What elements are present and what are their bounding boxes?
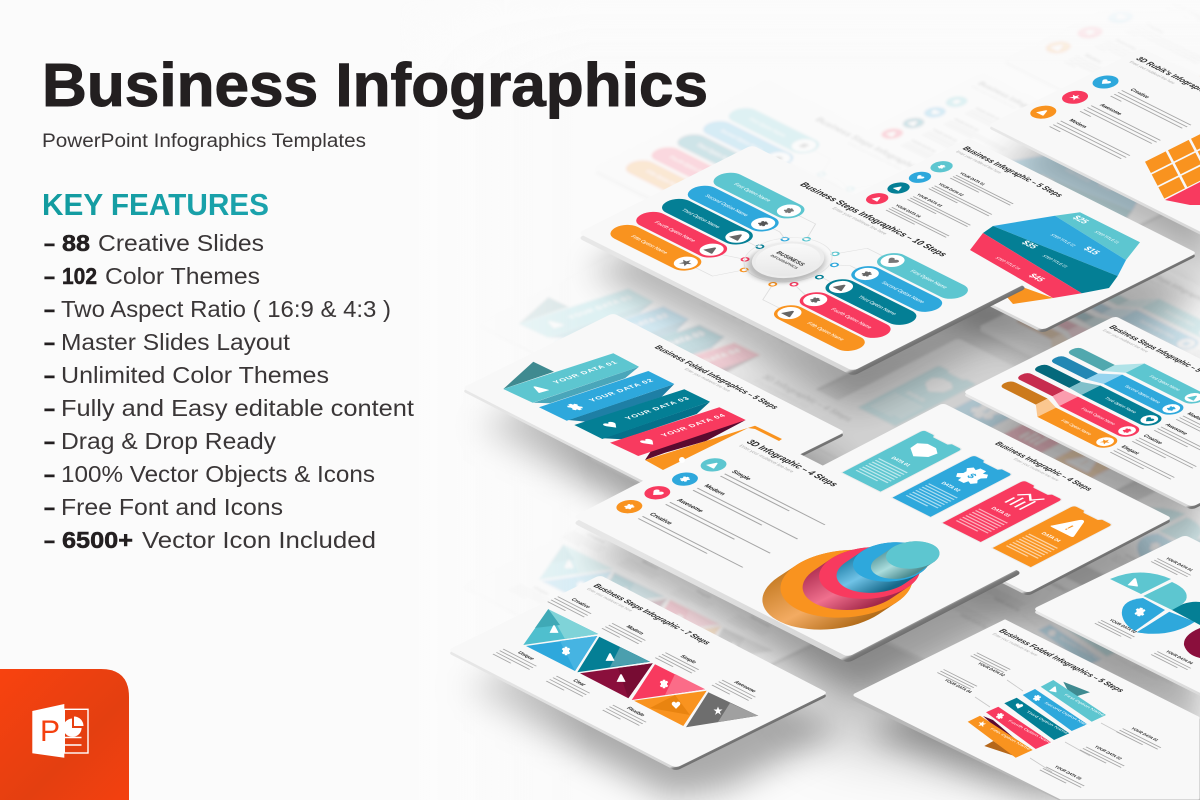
title: Business Infographics <box>42 51 708 119</box>
text: Creative <box>1111 86 1199 131</box>
chart: hexagon bands: $35 <box>1019 239 1041 250</box>
text: side notes: Awesome <box>1163 423 1189 436</box>
chart: vertical folded ribbon: Second Option Name <box>1043 701 1093 728</box>
text: Simple <box>655 649 706 675</box>
feature: 102 Color Themes <box>44 263 260 289</box>
card: DATA 01 <box>842 430 962 492</box>
chart: hexagon bands: STEP TITLE 01 <box>1093 230 1122 244</box>
hub: business infographics: BUSINESS <box>774 251 807 267</box>
text: Modern: Modern <box>624 625 645 636</box>
slide: Business Folded Infographics – 5 Steps: Enter your multilevel line here <box>683 367 733 393</box>
bar: Fourth Option Name <box>1009 372 1144 439</box>
card: DATA 01: DATA 01 <box>889 456 912 468</box>
slide: Business Steps Infographic – 5 Steps: Enter your multilevel line here <box>1101 329 1151 353</box>
bar: Third Option Name right: Third Option Name <box>856 295 898 316</box>
slide: lower Business Folded Infographics – 5 Steps: Business Folded Infographics – 5 Steps <box>996 628 1127 694</box>
bar: First Option Name right <box>871 250 974 302</box>
hub: business infographics: INFOGRAPHICS <box>769 254 800 270</box>
feature: 100% Vector Objects & Icons: 100% Vector Objects & Icons <box>61 461 375 487</box>
card: DATA 02 <box>892 455 1012 517</box>
bar: Third Option Name: Third Option Name <box>1103 396 1139 414</box>
faded ghost reflections of the slides <box>463 0 1200 735</box>
icon: teal circle <box>926 159 957 175</box>
text: data list: YOUR DATA 03 <box>915 193 945 208</box>
text: YOUR DATA 01: YOUR DATA 01 <box>1164 557 1195 572</box>
bar: Third Option Name left <box>656 196 759 248</box>
step: Modern: Modern <box>702 484 727 497</box>
bar: Third Option Name left: Third Option Name <box>679 208 721 229</box>
text: Clear: Clear <box>571 679 587 687</box>
subtitle: Enter your multilevel line here <box>830 207 889 236</box>
card: DATA 04 <box>993 506 1112 567</box>
feature: 88 Creative Slides: Creative Slides <box>98 230 264 256</box>
bar: Fourth Option Name left <box>630 209 734 261</box>
orange ribbon fold of the Folded Infographics slide <box>645 426 782 470</box>
text: YOUR DATA 01 <box>1116 725 1169 751</box>
text: Modern: Modern <box>1067 119 1088 129</box>
band: YOUR DATA 03 <box>574 389 710 439</box>
text: Creative <box>548 593 599 619</box>
step: Creative: Creative <box>647 512 675 526</box>
chart: folded ribbon <box>503 353 746 460</box>
text: Unique: Unique <box>515 651 536 661</box>
soft floor shadows beneath slides <box>460 86 1200 800</box>
icon: red circle <box>861 191 893 207</box>
feature: 6500+ Vector Icon Included: – <box>44 527 55 553</box>
feature: 6500+ Vector Icon Included <box>44 527 376 553</box>
feature: Fully and Easy editable content: Fully and Easy editable content <box>61 395 415 421</box>
text: side notes: Elegant <box>1119 445 1141 456</box>
feature: Free Font and Icons: – <box>44 494 55 520</box>
chart: vertical folded ribbon: Fifth Option Name <box>989 727 1032 751</box>
chart: triangle steps <box>523 609 758 727</box>
slide: lower Business Folded Infographics – 5 Steps <box>853 621 1200 800</box>
text: Unique <box>493 645 544 671</box>
chart: hexagon bands <box>970 212 1140 304</box>
step: Creative <box>611 497 755 571</box>
hub: business infographics <box>725 229 850 291</box>
bar: Second Option Name left <box>681 183 785 235</box>
slide: Business Steps Infographics – 10 Steps <box>578 145 1027 376</box>
text: Modern <box>1050 117 1138 161</box>
text: Simple: Simple <box>678 654 698 665</box>
feature: 6500+ Vector Icon Included: 6500+ <box>62 527 133 553</box>
slide: 3D Infographic – 4 Steps: Enter your multilevel line here <box>737 444 795 474</box>
band: YOUR DATA 04 <box>610 407 746 456</box>
text: Flexible <box>603 701 654 727</box>
icon: blue heart <box>1087 73 1124 91</box>
text: Creative: Creative <box>1128 88 1151 99</box>
chart: hexagon bands: $45 <box>1026 272 1048 283</box>
text: YOUR DATA 02: YOUR DATA 02 <box>976 662 1007 677</box>
ring dots <box>724 229 856 295</box>
bar: Fourth Option Name right <box>793 289 897 341</box>
text: YOUR DATA 05: YOUR DATA 05 <box>1053 765 1084 780</box>
text: data list <box>886 172 1020 239</box>
text: YOUR DATA 04: YOUR DATA 04 <box>943 678 974 694</box>
text: YOUR DATA 02 <box>965 653 1014 677</box>
text: YOUR DATA 04 <box>1151 648 1199 671</box>
feature: 6500+ Vector Icon Included: Vector Icon Included <box>142 527 376 553</box>
heading: key features: KEY FEATURES <box>42 187 269 222</box>
bar: Second Option Name <box>1049 349 1188 419</box>
card: DATA 04: DATA 04 <box>1039 532 1062 543</box>
icon: red star <box>1057 88 1093 106</box>
leader lines <box>975 680 1127 772</box>
slide: 3D Infographic – 4 Steps <box>573 427 1022 663</box>
text: YOUR DATA 01 <box>1151 555 1199 578</box>
text: data list: YOUR DATA 01 <box>958 172 987 186</box>
bar: Second Option Name: Second Option Name <box>1123 384 1163 404</box>
chart: pinwheel sectors <box>1110 572 1200 658</box>
chart: rubik cube face <box>1145 128 1200 205</box>
band: YOUR DATA 01: YOUR DATA 01 <box>551 359 620 385</box>
slide: Business Infographic – 4 Steps <box>799 403 1172 596</box>
bar: Fifth Option Name <box>987 380 1127 450</box>
bar: Third Option Name <box>1031 360 1166 428</box>
text: YOUR DATA 05 <box>1040 763 1092 789</box>
bar: Second Option Name right: Second Option Name <box>879 281 926 304</box>
chart: hexagon bands: STEP TITLE 04 <box>994 256 1023 270</box>
feature: 102 Color Themes: Color Themes <box>105 263 260 289</box>
card: DATA 04: ! <box>1061 524 1076 532</box>
bar: Fourth Option Name left: Fourth Option Name <box>652 221 697 243</box>
feature: Unlimited Color Themes: – <box>44 362 55 388</box>
powerpoint badge <box>0 669 129 800</box>
card: DATA 03: DATA 03 <box>989 506 1012 518</box>
bar: First Option Name left <box>707 170 811 222</box>
feature list <box>44 230 415 553</box>
feature: Master Slides Layout: – <box>44 329 55 355</box>
slide: Business Steps Infographic – 5 Steps <box>963 316 1200 510</box>
chart: hexagon bands: STEP TITLE 03 <box>1041 254 1070 268</box>
card: DATA 02: $ <box>963 472 979 480</box>
slide: Business Steps Infographic – 7 Steps <box>448 575 828 771</box>
band: YOUR DATA 04: YOUR DATA 04 <box>659 412 728 438</box>
chart: vertical folded ribbon: Third Option Name <box>1025 710 1069 735</box>
step: Simple <box>695 456 838 528</box>
text: Creative: Creative <box>569 598 592 609</box>
slide: Business Steps Infographic – 7 Steps: Enter your multilevel line here <box>586 587 635 613</box>
bar: Fifth Option Name left <box>604 222 708 274</box>
chart: vertical folded ribbon <box>968 680 1106 758</box>
subtitle: PowerPoint Infographics Templates <box>42 131 366 152</box>
slide: 3D Infographic – 4 Steps: 3D Infographic – 4 Steps <box>744 438 841 488</box>
icon: dark teal circle <box>883 180 914 196</box>
icon: blue circle <box>904 169 936 185</box>
feature: 102 Color Themes: – <box>44 263 55 289</box>
card: DATA 03 <box>943 480 1062 542</box>
text: YOUR DATA 04 <box>932 669 981 694</box>
bar: First Option Name left: First Option Name <box>732 183 772 203</box>
text: YOUR DATA 03: YOUR DATA 03 <box>1093 745 1124 760</box>
icon: powerpoint logo: P <box>40 715 60 748</box>
chart: hexagon bands: $25 <box>1070 214 1092 225</box>
text: Clear <box>546 672 597 698</box>
slide: Business Infographic – 5 Steps <box>814 138 1197 333</box>
text: Awesome: Awesome <box>732 680 757 694</box>
feature: Two Aspect Ratio: Two Aspect Ratio ( 16:9 & 4:3 ) <box>61 296 391 322</box>
slide: 3D Rubik's Infographic <box>988 48 1200 243</box>
slide: Business Infographic – 5 Steps: Enter your multilevel line here <box>955 150 1004 175</box>
feature: 102 Color Themes: 102 <box>62 263 97 289</box>
bar: First Option Name: First Option Name <box>1148 375 1182 392</box>
bar: Fourth Option Name right: Fourth Option Name <box>829 307 873 330</box>
text: side notes: Creative <box>1141 434 1164 445</box>
feature: Free Font and Icons: Free Font and Icons <box>61 494 283 520</box>
feature: Unlimited Color Themes: Unlimited Color Themes <box>61 362 329 388</box>
slide: Business Folded Infographics – 5 Steps <box>462 313 845 510</box>
text: data list: YOUR DATA 04 <box>894 204 923 218</box>
text: YOUR DATA 01: YOUR DATA 01 <box>1130 727 1160 742</box>
text: data list: YOUR DATA 02 <box>937 182 966 197</box>
title: Business Steps Infographics – 10 Steps <box>797 181 950 258</box>
slide: Business Infographic – 4 Steps: Business Infographic – 4 Steps <box>993 440 1095 492</box>
band: YOUR DATA 02: YOUR DATA 02 <box>587 377 656 403</box>
connector lines <box>694 214 883 309</box>
band: YOUR DATA 01 <box>503 353 639 403</box>
card: DATA 02: DATA 02 <box>939 481 962 493</box>
text: YOUR DATA 02 <box>1095 616 1142 640</box>
slide: Business Infographic – 4 Steps: Enter your multilevel line here <box>1012 457 1061 482</box>
chart: vertical folded ribbon: Fourth Option Name <box>1007 719 1054 745</box>
white fade toward the text column <box>0 0 400 800</box>
feature: Two Aspect Ratio: – <box>44 296 55 322</box>
feature: 88 Creative Slides: – <box>44 230 55 256</box>
bar: Fifth Option Name right: Fifth Option Name <box>805 322 846 342</box>
text: YOUR DATA 04: YOUR DATA 04 <box>1164 650 1195 665</box>
feature: Drag & Drop Ready: – <box>44 428 55 454</box>
bar: Fifth Option Name right <box>768 302 871 354</box>
text: YOUR DATA 02: YOUR DATA 02 <box>1108 618 1139 634</box>
chart: stacked 3D cylinders <box>753 520 971 632</box>
icon: orange triangle <box>1025 103 1062 121</box>
band: YOUR DATA 03: YOUR DATA 03 <box>623 395 692 421</box>
bar: Second Option Name right <box>845 263 949 315</box>
slide: Business Steps Infographic – 7 Steps: Business Steps Infographic – 7 Steps <box>591 583 714 646</box>
slide: 3D Rubik's Infographic: Enter your multilevel line here <box>1128 60 1177 85</box>
step: Modern <box>667 470 810 543</box>
text: Modern <box>602 620 653 645</box>
bar: Fourth Option Name: Fourth Option Name <box>1080 407 1118 426</box>
step: Simple: Simple <box>729 469 753 482</box>
slide: Business Folded Infographics – 5 Steps: Business Folded Infographics – 5 Steps <box>652 344 781 411</box>
bar: Third Option Name right <box>819 276 923 328</box>
slide: circular pinwheel infographic <box>1033 535 1200 727</box>
feature: 100% Vector Objects & Icons: – <box>44 461 55 487</box>
feature: Fully and Easy editable content: – <box>44 395 55 421</box>
slide: lower Business Folded Infographics – 5 Steps: Enter your multilevel line here <box>991 632 1040 657</box>
bar: First Option Name right: First Option Name <box>908 269 949 290</box>
text: side notes <box>1110 412 1200 481</box>
bar: Fifth Option Name: Fifth Option Name <box>1060 419 1094 436</box>
broad grey floor tone behind the slides <box>620 290 1170 770</box>
slide: Business Infographic – 5 Steps: Business Infographic – 5 Steps <box>960 145 1066 199</box>
text: Flexible: Flexible <box>624 706 646 717</box>
chart: hexagon bands: STEP TITLE 02 <box>1049 233 1078 247</box>
text: Awesome <box>1080 101 1169 146</box>
chart: vertical folded ribbon: First Option Name <box>1063 693 1106 717</box>
step: Awesome: Awesome <box>675 498 706 514</box>
text: Awesome <box>712 676 763 702</box>
step: Awesome <box>639 483 783 557</box>
feature: 88 Creative Slides: 88 <box>62 230 90 256</box>
text: YOUR DATA 03 <box>1080 743 1132 769</box>
text: Awesome: Awesome <box>1097 103 1123 116</box>
feature: Drag & Drop Ready: Drag & Drop Ready <box>61 428 277 454</box>
bar: Second Option Name left: Second Option Name <box>703 194 750 218</box>
feature: Master Slides Layout: Master Slides Layout <box>61 329 291 355</box>
band: YOUR DATA 02 <box>539 371 674 421</box>
chart: hexagon bands: $15 <box>1081 245 1103 256</box>
bar: First Option Name <box>1066 338 1200 411</box>
bar: Fifth Option Name left: Fifth Option Name <box>629 235 669 255</box>
